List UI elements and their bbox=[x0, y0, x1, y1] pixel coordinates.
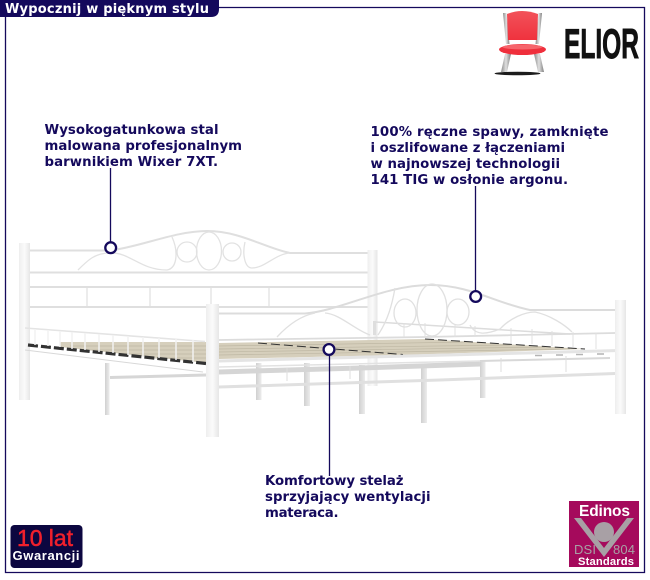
callout: steel paint marker bbox=[105, 168, 116, 253]
rear headboard bbox=[19, 231, 378, 400]
callout: slats marker bbox=[324, 344, 334, 476]
badge: Edinos standards: DSI bbox=[574, 542, 596, 557]
text block: steel paint bbox=[44, 123, 242, 170]
text block: slatted base bbox=[265, 474, 430, 521]
front rails bbox=[219, 350, 619, 387]
front headboard bbox=[219, 284, 615, 349]
text block: steel paint: barwnikiem Wixer 7XT. bbox=[44, 155, 218, 170]
badge: 10 year warranty: Gwarancji bbox=[12, 548, 80, 563]
badge: Edinos standards: 804 bbox=[613, 542, 635, 557]
text block: slatted base: Komfortowy stelaż bbox=[265, 474, 404, 489]
text block: welds bbox=[370, 125, 608, 188]
bed illustration bbox=[19, 231, 626, 437]
icon: red chair bbox=[494, 11, 546, 75]
text block: steel paint: Wysokogatunkowa stal bbox=[44, 123, 218, 138]
front legs bbox=[105, 360, 486, 423]
logo: Elior chair and wordmark bbox=[494, 11, 639, 75]
slatted base bbox=[28, 339, 585, 364]
badge: Edinos standards bbox=[569, 501, 639, 568]
text block: slatted base: materaca. bbox=[265, 506, 338, 521]
title banner: Wypocznij w pięknym stylu bbox=[5, 2, 209, 17]
badge: Edinos standards: Edinos bbox=[579, 503, 630, 520]
bed posts bbox=[206, 300, 626, 437]
text block: steel paint: malowana profesjonalnym bbox=[44, 139, 242, 154]
text block: welds: w najnowszej technologii bbox=[370, 157, 560, 172]
text block: slatted base: sprzyjający wentylacji bbox=[265, 490, 430, 505]
badge: 10 year warranty: 10 lat bbox=[17, 525, 74, 551]
text block: welds: 100% ręczne spawy, zamknięte bbox=[370, 125, 608, 140]
text block: welds: i oszlifowane z łączeniami bbox=[370, 141, 565, 156]
badge: 10 year warranty bbox=[10, 525, 82, 568]
callout: weld marker bbox=[470, 186, 481, 302]
text block: welds: 141 TIG w osłonie argonu. bbox=[370, 173, 568, 188]
left side rail bbox=[25, 328, 206, 378]
badge: Edinos standards: Standards bbox=[578, 556, 634, 568]
